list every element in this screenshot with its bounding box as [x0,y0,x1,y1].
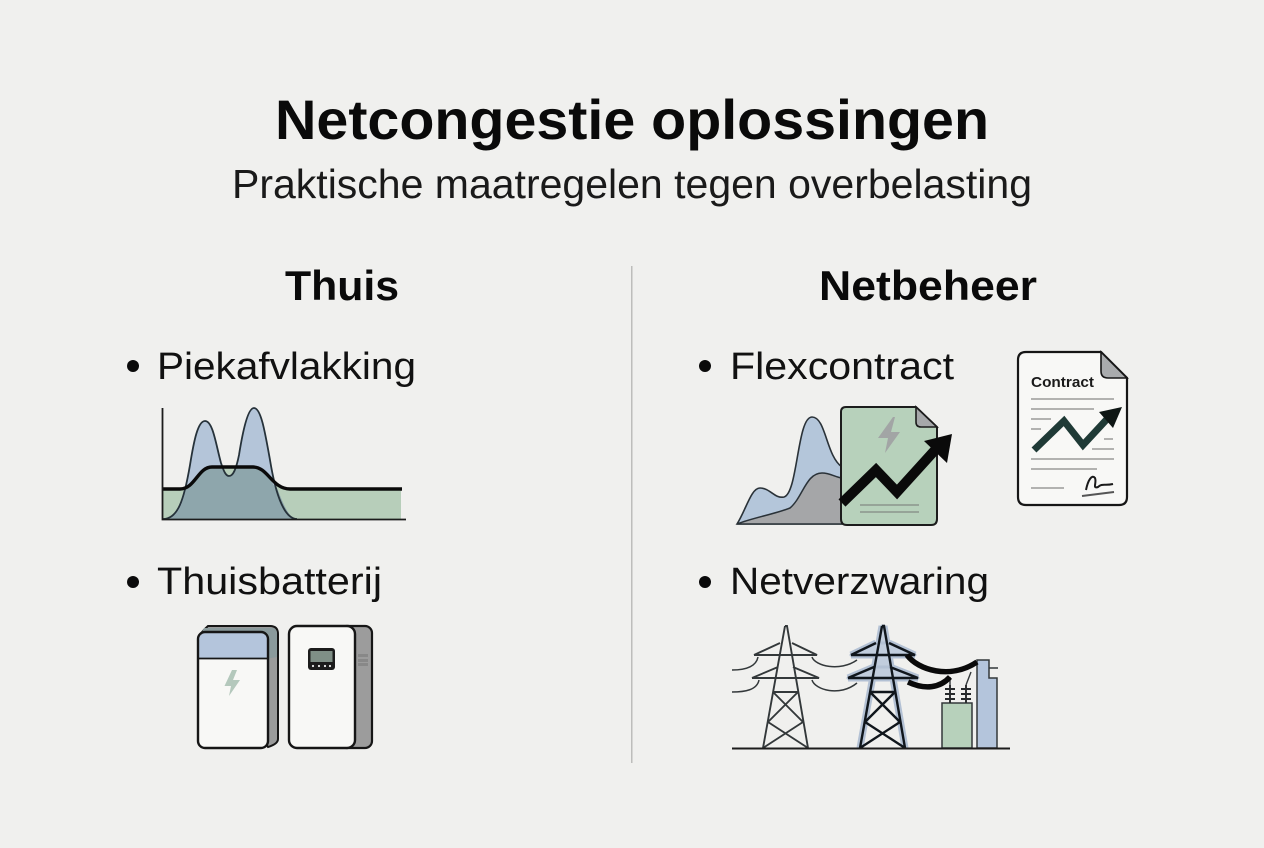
icon: flex chart with green document [737,407,952,525]
bullet item: Piekafvlakking: Piekafvlakking [157,346,416,388]
icon: contract document: Contract [1031,374,1094,391]
icon: contract document [1018,352,1127,505]
thin wires [732,657,857,692]
tower 2 [848,626,918,748]
icon: transmission towers and substation [732,626,1010,748]
title: Netcongestie oplossingen [275,88,989,151]
heavy cables [907,655,977,672]
ground line [732,748,1010,750]
bullet item: Thuisbatterij: Thuisbatterij [157,561,382,603]
heading: Netbeheer: Netbeheer [819,262,1037,309]
substation building [977,660,997,748]
tower 1 [752,626,819,748]
column divider [631,266,632,763]
bullet item: Netverzwaring: Netverzwaring [730,561,989,603]
subtitle: Praktische maatregelen tegen overbelasting [232,161,1032,207]
transformer [942,703,972,748]
chart: peak shaving [162,408,406,520]
bullet item: Flexcontract: Flexcontract [730,346,954,388]
icon: home battery [198,626,372,748]
heading: Thuis: Thuis [285,262,399,309]
highlighted tower glow [848,626,918,748]
